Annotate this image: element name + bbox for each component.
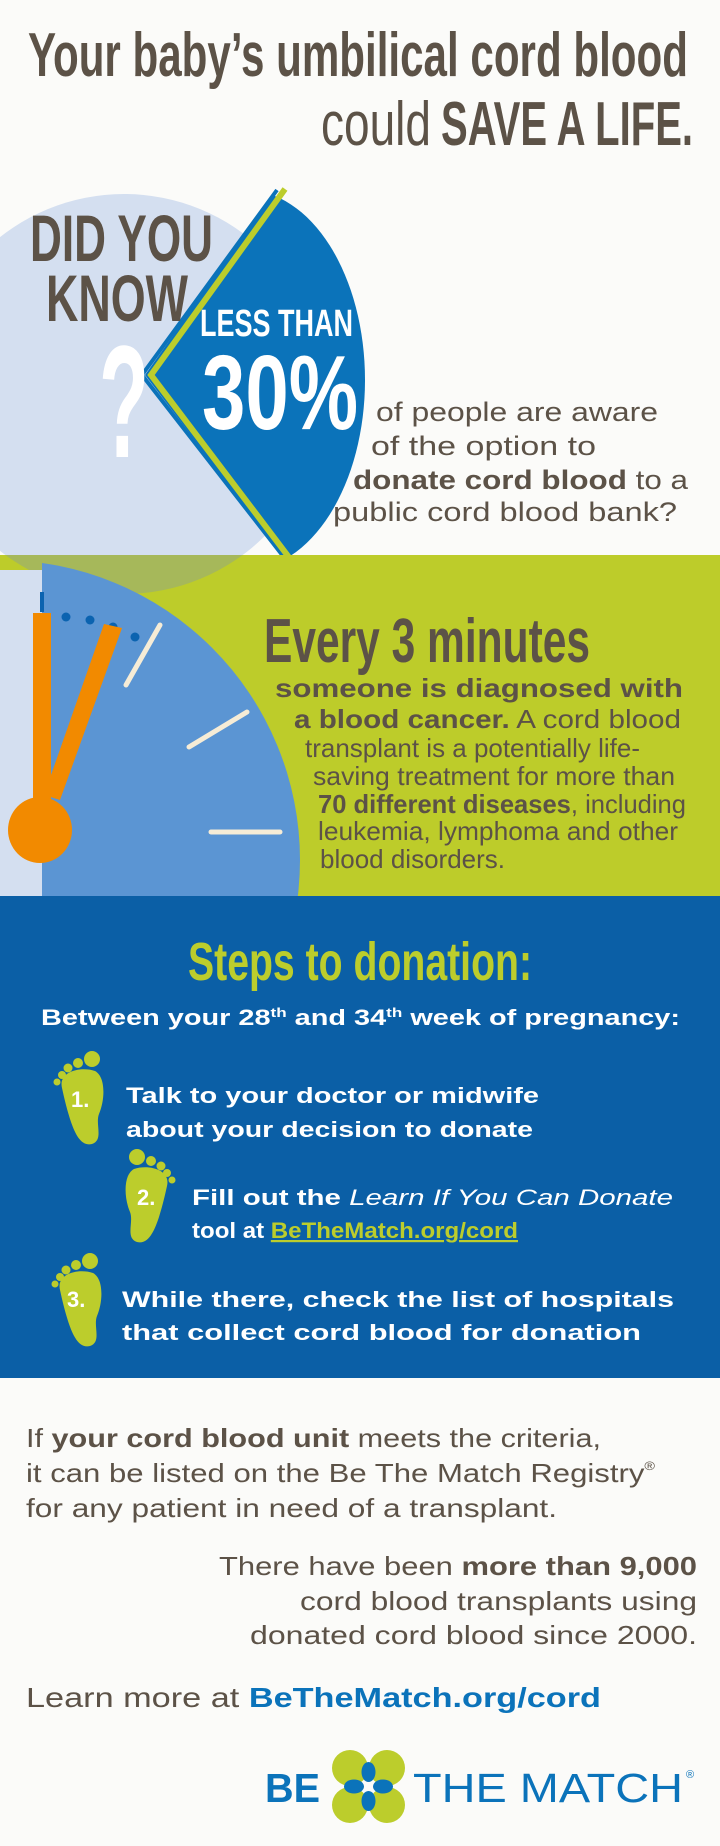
icon: footprint 2: 2. (137, 1185, 155, 1210)
icon: footprint 1 (54, 1051, 103, 1144)
subheading: week of pregnancy: (402, 1005, 680, 1030)
step 3: that collect cord blood for donation (122, 1320, 641, 1345)
text: learn more: Learn more at BeTheMatch.org/cord (26, 1682, 601, 1713)
text: blood cancer: 70 different diseases, including (318, 789, 686, 819)
logo: be the match: ® (686, 1769, 694, 1781)
logo: be the match (265, 1750, 694, 1823)
heading: did you know: DID YOU (30, 201, 213, 275)
icon: footprint 3: 3. (67, 1287, 85, 1312)
panel: did you know (0, 189, 689, 594)
step 3: While there, check the list of hospitals (122, 1287, 674, 1312)
title (28, 21, 693, 159)
panel: every 3 minutes (0, 555, 720, 896)
heading: did you know: KNOW (46, 261, 188, 335)
step 1 (54, 1051, 539, 1144)
step 3 (52, 1253, 674, 1346)
text: blood cancer (275, 673, 686, 874)
text: blood cancer: leukemia, lymphoma and other (318, 816, 678, 846)
clock hands (8, 613, 122, 863)
icon: footprint 1: 1. (71, 1087, 89, 1112)
logo: be the match: THE MATCH (413, 1765, 683, 1811)
text: registry: for any patient in need of a transplant. (26, 1493, 557, 1523)
icon: footprint 2 (126, 1149, 176, 1242)
icon: question mark: ? (99, 312, 149, 491)
text: 9,000 transplants: cord blood transplants using (300, 1586, 697, 1616)
icon: logo circles (332, 1750, 405, 1823)
V line (142, 189, 291, 560)
text: blood cancer: someone is diagnosed with (275, 673, 683, 703)
step 2: Fill out the Learn If You Can Donate (192, 1185, 673, 1210)
blue wedge (145, 196, 365, 555)
subheading: th (271, 1005, 287, 1020)
text: registry: it can be listed on the Be The Match Registry (26, 1458, 543, 1488)
text: blood cancer: transplant is a potentially life- (305, 733, 640, 763)
subheading: Between your 28 (41, 1005, 216, 1030)
text: registry: ® (644, 1459, 655, 1473)
text: awareness: donate cord blood to a (353, 465, 689, 495)
text: blood cancer: a blood cancer. A cord blood (294, 704, 681, 734)
text: blood cancer: blood disorders. (320, 844, 505, 874)
text: awareness: public cord blood bank? (333, 497, 677, 527)
panel: steps to donation (0, 896, 720, 1378)
title: could (321, 90, 431, 159)
clock face (8, 563, 300, 896)
step 1: about your decision to donate (126, 1117, 533, 1142)
light blue circle (0, 194, 265, 555)
text: blood cancer: saving treatment for more than (313, 761, 675, 791)
stat: less than 30% (200, 303, 358, 452)
heading: did you know (30, 201, 213, 335)
text: awareness: of people are aware (376, 397, 658, 427)
text: awareness: of the option to (371, 431, 596, 461)
text: registry: If your cord blood unit meets the criteria, (26, 1423, 601, 1453)
step 2 (126, 1149, 673, 1243)
icon: footprint 3 (52, 1253, 101, 1346)
text: awareness (333, 397, 689, 527)
step 2: tool at BeTheMatch.org/cord (192, 1218, 518, 1243)
subheading: and 34 (287, 1005, 387, 1030)
text: 9,000 transplants (219, 1551, 697, 1650)
stat: less than 30%: 30% (202, 334, 358, 452)
heading: steps to donation: Steps to donation: (188, 932, 532, 992)
step 1: Talk to your doctor or midwife (126, 1083, 539, 1108)
subheading: th (386, 1005, 402, 1020)
stat: less than 30%: LESS THAN (200, 303, 353, 345)
logo: be the match: BE (265, 1765, 320, 1811)
text: 9,000 transplants: donated cord blood since 2000. (250, 1620, 697, 1650)
text: 9,000 transplants: There have been more than 9,000 (219, 1551, 697, 1581)
text: registry (26, 1423, 655, 1523)
